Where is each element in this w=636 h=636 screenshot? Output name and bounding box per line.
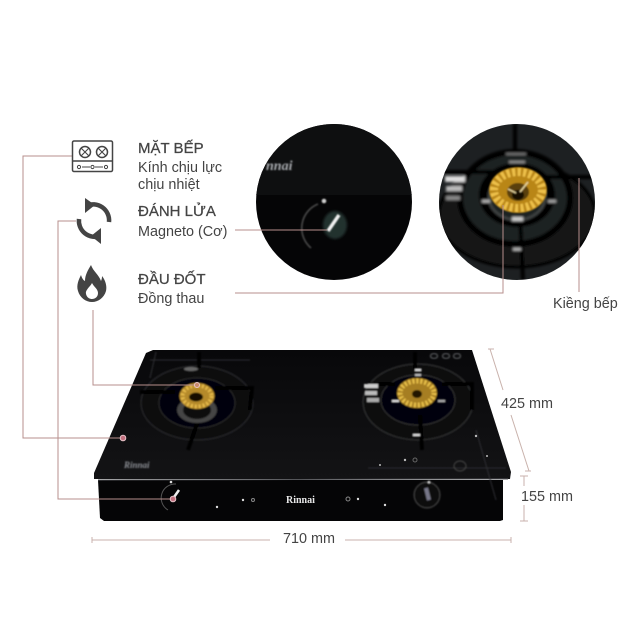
height dimension line [520,476,528,521]
width dimension line [92,537,511,543]
label: 710 mm: 710 mm [283,531,335,547]
left knob [161,481,179,510]
zoom circle: burner [439,124,600,280]
leader: kiềng bếp [578,178,580,292]
cooktop photo [94,350,511,521]
text: đánh lửa: Magneto (Cơ) [138,224,227,240]
right burner [363,352,473,450]
front logo: Rinnai [286,495,315,506]
control icons top right [430,354,460,358]
leader: đánh lửa [58,221,173,499]
infographic canvas [22,124,618,543]
icon: cooktop [72,141,112,172]
label: kiềng bếp: Kiềng bếp [553,296,618,312]
text: đầu đốt: Đồng thau [138,291,204,307]
dimension lines [92,349,531,543]
faint glass markings [150,352,506,500]
leader: đầu đốt [93,310,197,385]
knob body [323,211,347,239]
right knob [414,481,440,508]
glass logo: Rinnai [123,460,150,470]
text: mặt bếp: chịu nhiệt [138,177,200,193]
text: mặt bếp: MẶT BẾP [138,140,204,157]
pan support arms [440,124,600,280]
text: mặt bếp [138,140,222,193]
leader: magneto zoom [235,229,327,231]
gold burner head [489,167,547,213]
left burner [140,352,253,450]
highlights [445,176,465,182]
rinnai logo fragment: nnai [266,159,293,174]
burner ring [439,163,595,267]
knob pointer [328,215,339,231]
top panel dots [379,435,488,466]
text: đánh lửa [138,202,227,240]
text: đầu đốt [138,270,206,307]
text: mặt bếp: Kính chịu lực [138,160,222,176]
cooktop glass top [94,350,511,479]
label: 155 mm: 155 mm [521,489,573,505]
leader: mặt bếp [23,156,123,438]
cooktop front panel [98,480,503,521]
front panel dots [216,497,386,508]
label: 425 mm: 425 mm [501,396,553,412]
text: đánh lửa: ĐÁNH LỬA [138,202,216,220]
text: đầu đốt: ĐẦU ĐỐT [138,270,206,288]
knob arc [302,204,318,248]
knob dot [322,199,326,203]
marker dots [120,382,200,502]
leader: burner zoom [235,205,503,293]
icon: flame [77,265,106,302]
depth dimension line [488,349,531,471]
icon: ignition arrows [79,198,109,244]
zoom circle: ignition knob [256,124,412,280]
leader lines [23,156,579,499]
